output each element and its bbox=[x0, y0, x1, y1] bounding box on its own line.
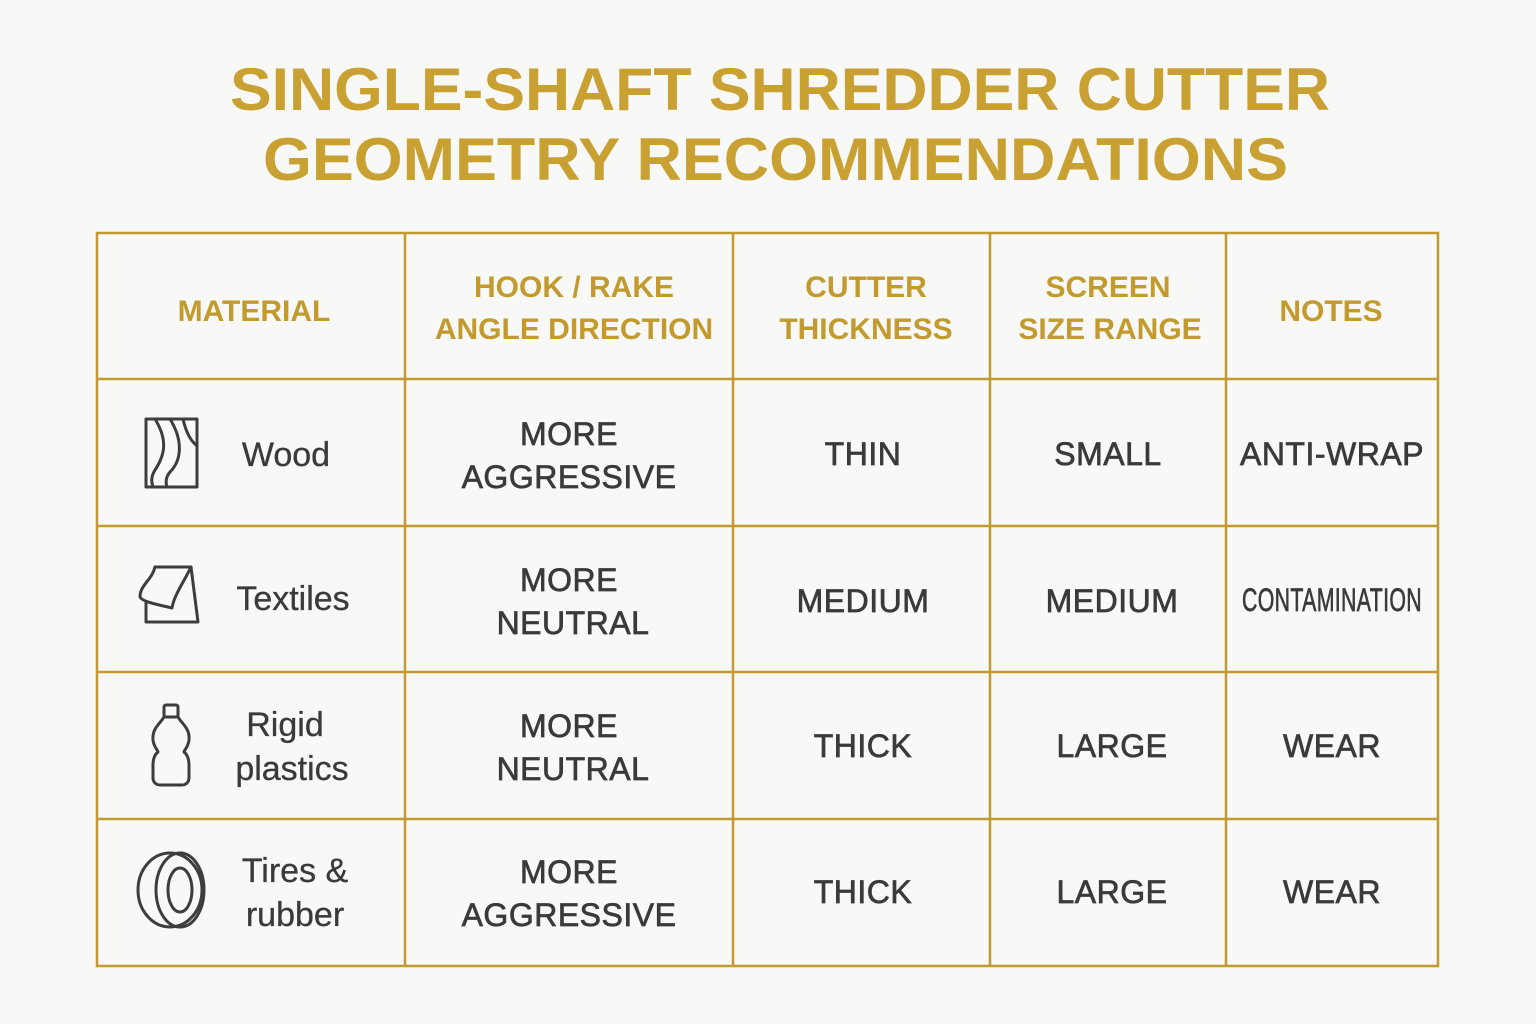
row: rigid plastics: plastics bbox=[235, 750, 349, 788]
row: textiles: CONTAMINATION bbox=[1242, 582, 1422, 618]
row: textiles: MORE bbox=[520, 562, 618, 598]
row: wood: MORE bbox=[520, 416, 618, 452]
row: wood: Wood bbox=[242, 436, 330, 474]
row: rigid plastics: THICK bbox=[814, 728, 912, 764]
header row: SIZE RANGE bbox=[1018, 313, 1202, 346]
row: tires: THICK bbox=[814, 874, 912, 910]
icon: tire bbox=[138, 853, 204, 927]
row: tires: WEAR bbox=[1283, 874, 1381, 910]
row: rigid plastics: LARGE bbox=[1057, 728, 1167, 764]
row: tires: Tires & bbox=[242, 852, 349, 890]
icon: bottle bbox=[153, 705, 189, 785]
header row bbox=[178, 271, 1383, 346]
table grid bbox=[97, 233, 1438, 966]
row: tires: LARGE bbox=[1057, 874, 1167, 910]
row: rigid plastics: Rigid bbox=[246, 706, 324, 744]
row: tires: AGGRESSIVE bbox=[462, 897, 676, 933]
header row: MATERIAL bbox=[178, 295, 330, 328]
header row: THICKNESS bbox=[779, 313, 953, 346]
row: tires: MORE bbox=[520, 854, 618, 890]
row: rigid plastics bbox=[153, 705, 1381, 788]
row: textiles: MEDIUM bbox=[797, 583, 929, 619]
header row: CUTTER bbox=[805, 271, 927, 304]
row: tires: rubber bbox=[246, 896, 344, 934]
row: textiles bbox=[140, 562, 1422, 641]
title: SINGLE-SHAFT SHREDDER CUTTER bbox=[230, 56, 1330, 123]
row: rigid plastics: NEUTRAL bbox=[497, 751, 649, 787]
row: wood: THIN bbox=[825, 436, 901, 472]
row: wood bbox=[146, 416, 1424, 495]
row: rigid plastics: WEAR bbox=[1283, 728, 1381, 764]
icon: textiles bbox=[140, 567, 198, 622]
row: textiles: NEUTRAL bbox=[497, 605, 649, 641]
row: wood: ANTI-WRAP bbox=[1240, 436, 1424, 472]
row: wood: SMALL bbox=[1054, 436, 1162, 472]
title: GEOMETRY RECOMMENDATIONS bbox=[263, 126, 1288, 193]
header row: ANGLE DIRECTION bbox=[435, 313, 713, 346]
row: wood: AGGRESSIVE bbox=[462, 459, 676, 495]
icon: wood bbox=[146, 419, 197, 487]
header row: NOTES bbox=[1279, 295, 1383, 328]
row: textiles: Textiles bbox=[236, 580, 350, 618]
row: rigid plastics: MORE bbox=[520, 708, 618, 744]
row: textiles: MEDIUM bbox=[1046, 583, 1178, 619]
header row: SCREEN bbox=[1045, 271, 1171, 304]
title bbox=[230, 56, 1330, 193]
header row: HOOK / RAKE bbox=[474, 271, 674, 304]
row: tires bbox=[138, 852, 1381, 934]
